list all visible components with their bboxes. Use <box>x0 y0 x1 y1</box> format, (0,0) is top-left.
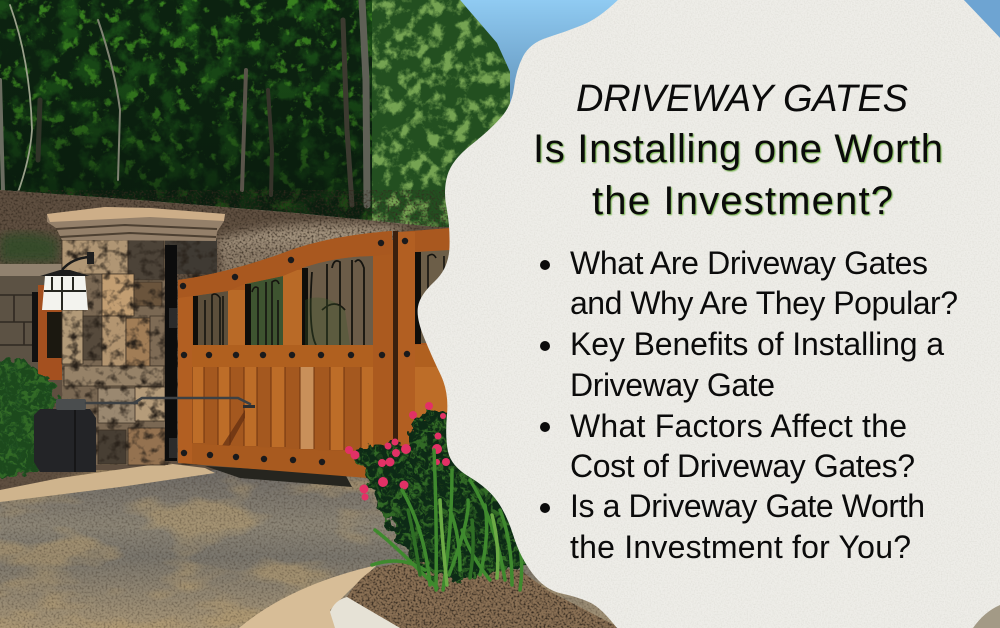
road colour mottling <box>0 470 630 628</box>
item: key benefits: Driveway Gate <box>570 367 775 403</box>
subtitle line one: Is Installing one Worth <box>533 127 943 171</box>
bottom rail <box>178 443 393 480</box>
gate shadow band <box>205 466 352 487</box>
middle rail <box>178 345 393 367</box>
small side gate <box>38 285 63 380</box>
item: key benefits <box>540 326 944 403</box>
tree trunks <box>0 0 367 205</box>
subtitle line two: the Investment? <box>592 179 893 223</box>
item: what are driveway gates <box>540 245 958 321</box>
gate window openings <box>193 256 373 345</box>
item: cost factors: Cost of Driveway Gates? <box>570 448 915 484</box>
driveway gate: right leaf <box>393 228 450 476</box>
paper blob panel <box>410 0 1000 628</box>
understory shade <box>0 50 372 220</box>
black hinges <box>169 308 177 458</box>
driveway gate: left leaf <box>178 231 396 480</box>
concrete curb: planting island <box>239 565 377 628</box>
forest background <box>0 0 522 235</box>
stile posts <box>178 240 393 476</box>
mulch bed <box>347 562 617 628</box>
title <box>533 78 943 223</box>
bright tree at right <box>372 0 510 227</box>
road surface <box>0 470 630 628</box>
white curb edge <box>330 597 400 628</box>
paper texture <box>410 0 1000 628</box>
pillar cap <box>47 207 225 241</box>
gate operator arm <box>86 398 255 408</box>
sky <box>455 0 1000 110</box>
lit canopy highlights <box>0 0 372 235</box>
item: cost factors: What Factors Affect the <box>570 408 907 444</box>
bullet list <box>540 245 958 565</box>
item: key benefits: Key Benefits of Installing a <box>570 326 944 362</box>
left shrub <box>0 355 65 480</box>
item: worth the investment: the Investment for You? <box>570 529 911 565</box>
item: worth the investment <box>540 488 925 565</box>
gate operator motor box <box>34 399 96 472</box>
lower board panels <box>192 367 373 452</box>
road texture <box>0 470 630 628</box>
wall lantern <box>40 252 94 310</box>
top rail <box>178 231 392 298</box>
stone texture <box>62 240 217 465</box>
sky corner: top right <box>960 0 1000 40</box>
gravel hillside <box>0 190 450 505</box>
item: what are driveway gates: and Why Are They Popular? <box>570 285 958 321</box>
rose bush <box>340 400 535 590</box>
iron studs <box>180 240 385 465</box>
title line: driveway gates: DRIVEWAY GATES <box>576 78 908 120</box>
stone pillar <box>47 207 225 465</box>
left stone wall <box>0 264 63 380</box>
item: what are driveway gates: What Are Driveway Gates <box>570 245 928 281</box>
pink roses <box>345 402 450 500</box>
road corner: bottom right <box>973 605 1000 628</box>
item: cost factors <box>540 408 915 484</box>
concrete curb: left <box>0 463 215 502</box>
iris blades <box>372 450 522 590</box>
item: worth the investment: Is a Driveway Gate Worth <box>570 488 925 524</box>
black gate post <box>165 245 177 461</box>
